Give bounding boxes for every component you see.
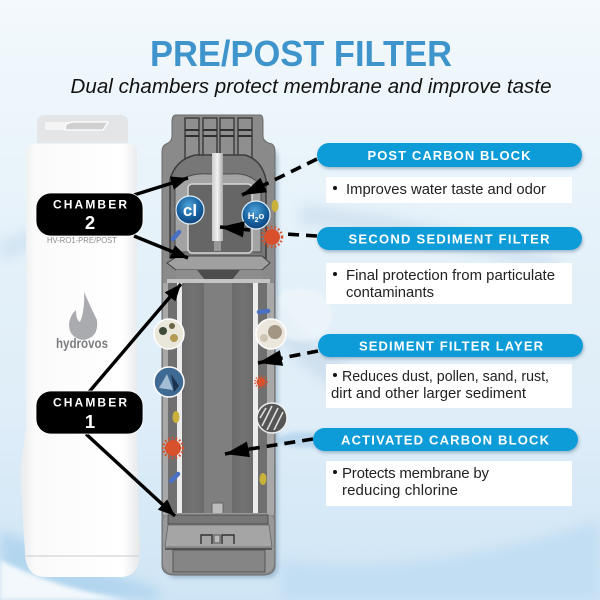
label: chamber 1	[36, 391, 143, 434]
heading pill: POST CARBON BLOCK	[368, 148, 531, 163]
white filter cartridge	[20, 115, 140, 577]
arrow: sediment layer	[258, 351, 318, 363]
icon: red virus left	[163, 438, 183, 458]
title: PRE/POST FILTER	[150, 33, 452, 74]
label: chamber 2	[36, 193, 143, 236]
brand: hydrovos	[56, 335, 108, 351]
icon: yellow spores	[172, 200, 278, 485]
arrow: chamber 2 to lower	[134, 236, 188, 258]
contaminants and media icons	[154, 196, 287, 485]
label: chamber 1: CHAMBER	[53, 396, 127, 410]
heading pill	[317, 143, 582, 167]
text box: dirt and other larger sediment	[331, 385, 527, 402]
arrow: chamber 1 to lower	[86, 434, 175, 516]
text box: contaminants	[346, 284, 434, 301]
icon: water bubble	[242, 201, 270, 229]
label: chamber 1: 1	[85, 411, 95, 432]
icon: water bubble: 2	[255, 217, 259, 224]
label: chamber 2: CHAMBER	[53, 198, 127, 212]
icon: water bubble: o	[258, 211, 264, 222]
top ports	[185, 118, 252, 162]
icon: chlorine bubble	[176, 196, 204, 224]
icon: chlorine bubble: cl	[183, 201, 197, 220]
panel: second sediment filter	[317, 227, 582, 304]
arrow: post carbon block	[242, 159, 317, 195]
icon: blue bacteria	[171, 232, 268, 481]
text box: Final protection from particulate	[346, 267, 555, 284]
text box	[326, 364, 572, 408]
text box	[326, 177, 572, 203]
heading pill	[317, 227, 582, 250]
text box: Improves water taste and odor	[346, 181, 546, 198]
subtitle: Dual chambers protect membrane and improve taste	[70, 75, 552, 98]
text box: reducing chlorine	[342, 482, 458, 499]
text box: Reduces dust, pollen, sand, rust,	[342, 368, 549, 385]
arrow: activated carbon	[225, 439, 313, 454]
arrow: second sediment	[220, 227, 317, 236]
icon: hydrovos drop	[69, 292, 97, 340]
upper chamber	[170, 155, 266, 258]
panel: post carbon block	[317, 143, 582, 203]
heading pill	[318, 334, 583, 357]
heading pill: SEDIMENT FILTER LAYER	[359, 338, 544, 354]
icon: water bubble: H	[248, 211, 255, 222]
icon: fiber photo	[257, 403, 287, 433]
arrow: chamber 1 to upper	[89, 284, 181, 392]
heading pill: SECOND SEDIMENT FILTER	[348, 232, 550, 246]
label: chamber 2: 2	[85, 212, 95, 233]
icon: red virus small	[255, 376, 267, 388]
icon: red virus large top	[262, 227, 282, 247]
heading pill: ACTIVATED CARBON BLOCK	[341, 432, 550, 448]
panel: activated carbon block	[313, 428, 578, 506]
icon: carbon photo	[154, 367, 184, 397]
lower chamber	[167, 279, 270, 283]
text box	[326, 461, 572, 506]
icon: sediment photo	[154, 319, 184, 349]
filter cross-section	[162, 115, 278, 578]
text box: Protects membrane by	[342, 465, 490, 482]
panel: sediment filter layer	[318, 334, 583, 408]
post carbon block	[188, 184, 252, 253]
center stem	[212, 153, 223, 241]
model text: HV-RO1-PRE/POST	[47, 236, 117, 245]
heading pill	[313, 428, 578, 451]
text box	[326, 263, 572, 304]
bottom cap	[163, 513, 274, 573]
arrow: chamber 2 to upper	[134, 178, 188, 195]
icon: pollen photo	[256, 319, 286, 349]
